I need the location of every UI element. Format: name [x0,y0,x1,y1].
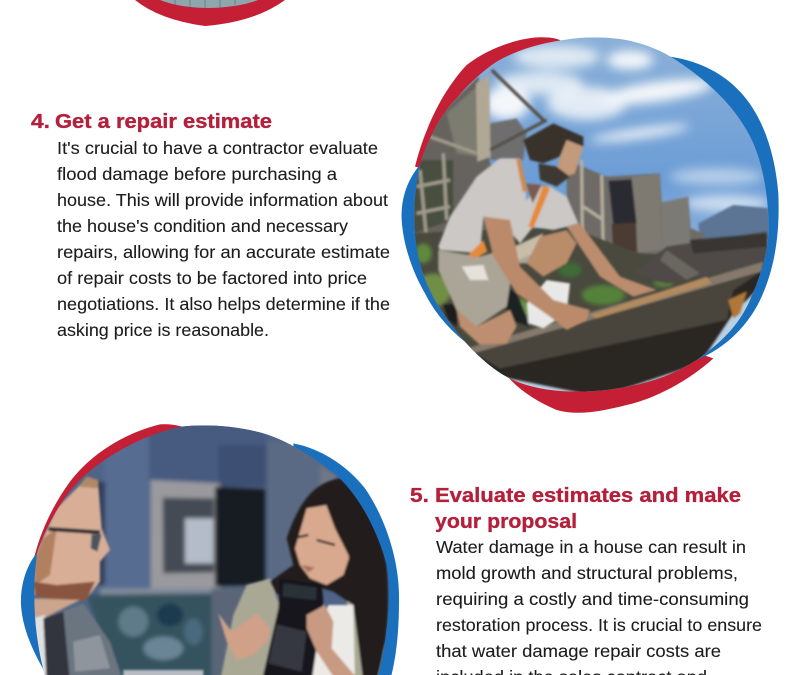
worktop and backsplash [100,588,267,595]
heading: step 5: your proposal [435,510,577,533]
text block: step 4 description: It's crucial to have a contractor evaluate [57,138,378,158]
heading: step 4: Get a repair estimate [55,110,272,133]
roof plank [467,262,763,397]
text block: step 4 description: house. This will provide information about [57,190,388,210]
photo blob: contractor on roof [402,37,779,413]
calculator [262,578,323,675]
man [33,477,203,675]
heading: step 5: 5. [410,484,429,507]
heading: step 5: Evaluate estimates and make [435,484,741,507]
text block: step 4 description: asking price is reasonable. [57,320,269,340]
woman [218,478,388,675]
text block: step 5 description: mold growth and structural problems, [436,563,738,583]
stone buildings [410,70,704,273]
text block: step 4 description: the house's condition and necessary [57,216,348,236]
hands [307,605,360,675]
mountain [698,205,770,240]
photo blob: couple with calculator [20,424,400,675]
text block: step 4 description: repairs, allowing for an accurate estimate [57,242,390,262]
image fragment: previous section photo blob [135,0,285,26]
text block: step 5 description [436,537,762,675]
man [438,123,657,345]
microwave [151,480,220,592]
timber roof pile [633,232,770,283]
heading: step 5 [410,484,741,533]
ground behind man [410,227,767,353]
text block: step 5 description: Water damage in a house can result in [436,537,746,557]
text block: step 5 description: that water damage repair costs are [436,641,721,661]
text block: step 4 description: of repair costs to be factored into price [57,268,367,288]
text block: step 5 description: restoration process. It is crucial to ensure [436,615,762,635]
text block: step 4 description: flood damage before purchasing a [57,164,337,184]
foliage [415,243,673,318]
text block: step 4 description [57,138,390,340]
text block: step 4 description: negotiations. It also helps determine if the [57,294,390,314]
text block: step 5 description: requiring a costly and time-consuming [436,589,749,609]
heading: step 4: 4. [31,110,50,133]
